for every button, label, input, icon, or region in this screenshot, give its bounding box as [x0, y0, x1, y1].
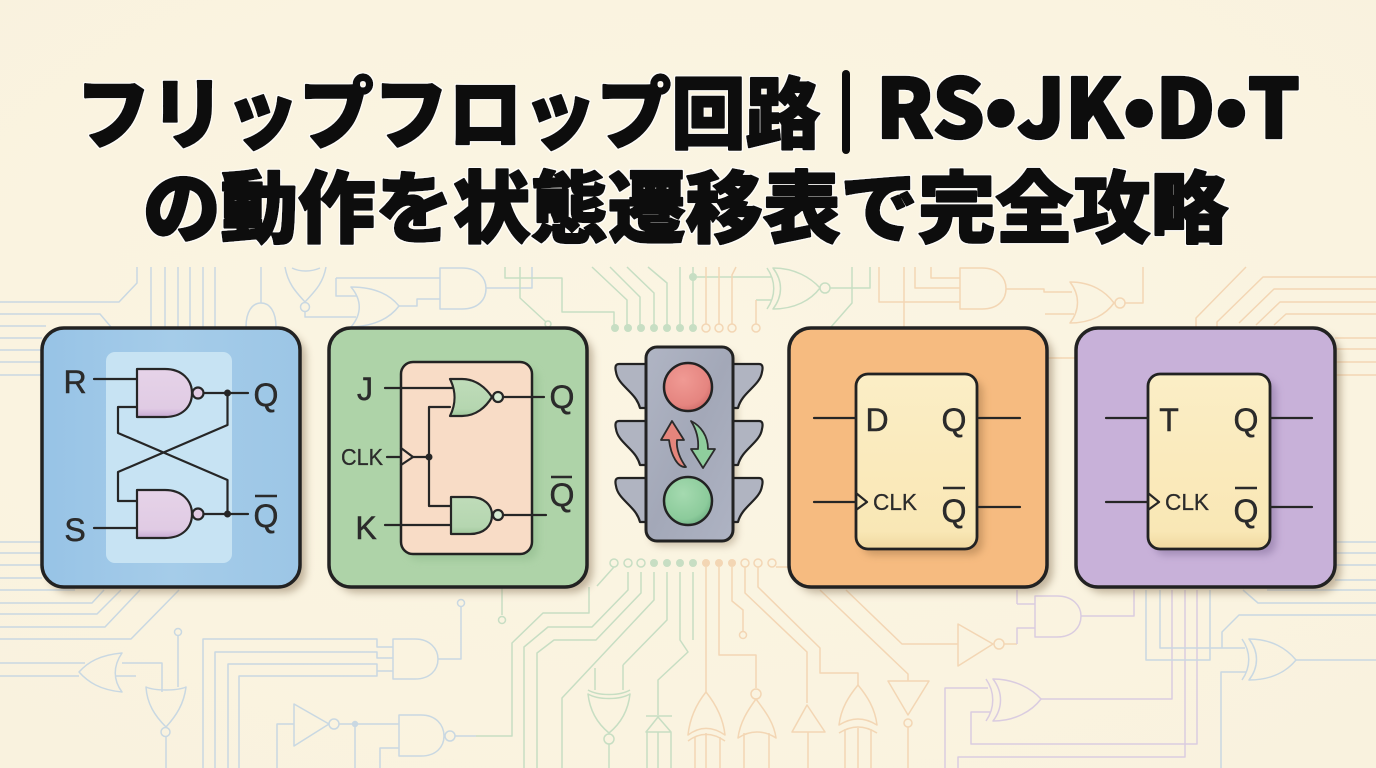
RS wiring [94, 379, 248, 528]
JK labels: K [355, 510, 377, 546]
background circuit: lower-middle orange traces and gates [688, 559, 1017, 768]
JK labels: Q [550, 379, 574, 415]
JK labels: CLK [341, 444, 384, 470]
background circuit: lower-middle green traces and gates [476, 559, 697, 768]
JK labels [341, 371, 574, 546]
D wiring [814, 418, 1020, 510]
background circuit: lower-left blue traces and gates [0, 590, 476, 768]
JK lower NAND gate [451, 497, 503, 534]
panel: JK flip-flop [329, 328, 593, 593]
RS labels: R [63, 364, 87, 400]
D labels: CLK [873, 489, 918, 515]
title bar [842, 70, 850, 154]
T labels: Q [1234, 493, 1258, 529]
traffic light body [646, 347, 733, 541]
icon: traffic light [615, 347, 763, 546]
green lamp [664, 477, 712, 525]
D labels [865, 402, 966, 529]
background circuit: lower-right purple traces and gates [945, 590, 1197, 768]
title line 2: の動作を状態遷移表で完全攻略 [143, 147, 1228, 259]
panel: D flip-flop [789, 328, 1053, 593]
T labels: T [1159, 402, 1179, 438]
JK labels: J [357, 371, 373, 407]
T labels: CLK [1165, 489, 1210, 515]
D labels: D [865, 402, 889, 438]
background circuit: lower-right blue traces and gates [1146, 542, 1376, 768]
title separator and letters: RS•JK•D•T [876, 43, 1300, 162]
background circuit: top orange traces and gates [702, 267, 1376, 375]
panel: RS flip-flop [42, 328, 306, 593]
RS upper NAND gate [137, 369, 204, 417]
D labels: Q [942, 402, 966, 438]
JK upper NOR gate [450, 379, 503, 416]
RS lower NAND gate [137, 490, 204, 538]
RS labels [63, 364, 278, 548]
title line 1: フリップフロップ回路 [76, 53, 820, 165]
D labels: Q [942, 493, 966, 529]
RS labels: Q [254, 498, 278, 534]
red lamp [664, 363, 712, 411]
traffic light visors [615, 364, 763, 522]
RS labels: Q [254, 377, 278, 413]
T labels [1159, 402, 1258, 529]
JK wiring [385, 388, 546, 525]
T wiring [1106, 418, 1312, 510]
RS labels: S [64, 512, 86, 548]
T labels: Q [1234, 402, 1258, 438]
title [76, 43, 1300, 259]
background circuit: top green traces and dots [505, 267, 870, 332]
green down arrow [691, 421, 715, 468]
JK labels: Q [550, 477, 574, 513]
panel: T flip-flop [1076, 328, 1341, 593]
background circuit: top blue traces and gates [0, 267, 532, 578]
red up arrow [661, 421, 686, 467]
